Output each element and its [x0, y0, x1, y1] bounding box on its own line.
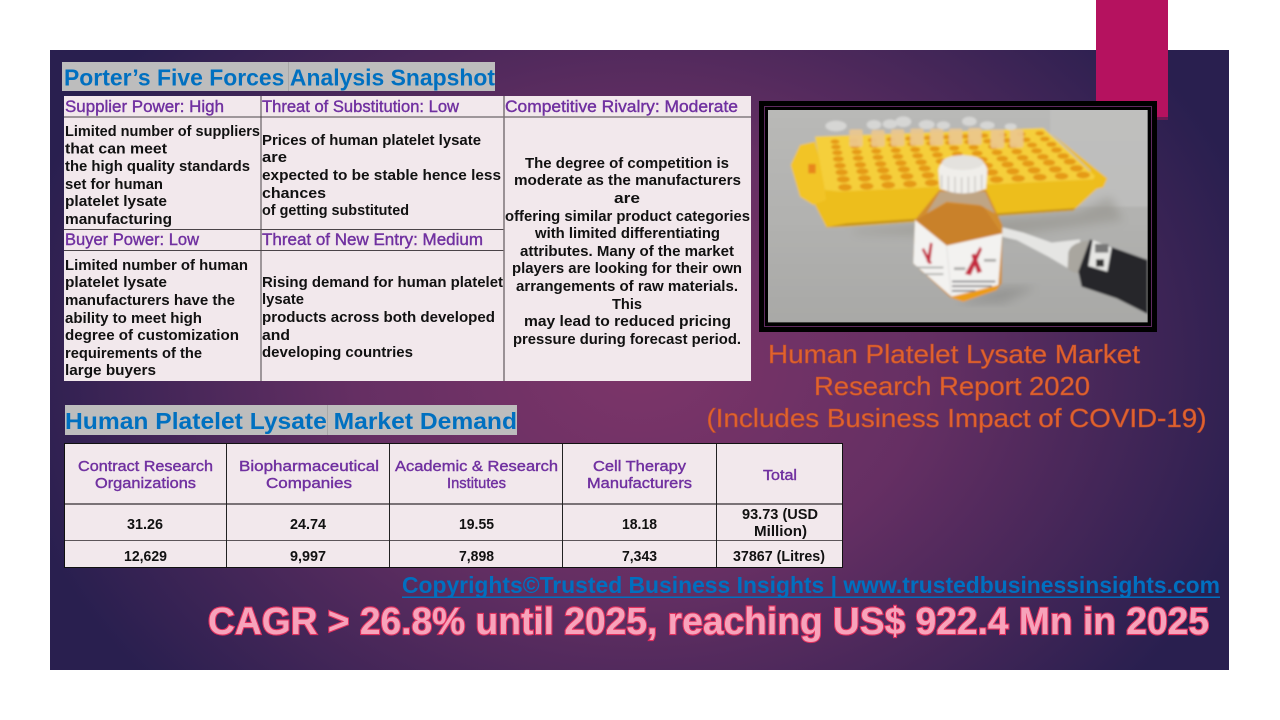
- text block: threat of substitution: Prices of human platelet lysate: [262, 132, 481, 149]
- photo: platelet lysate bottle with yellow tube rack: [759, 101, 1157, 332]
- row: USD million values: Million): [754, 523, 807, 540]
- row: litre values: 7,343: [622, 548, 657, 565]
- text block: competitive rivalry: The degree of competition is: [525, 155, 729, 172]
- row: USD million values: 18.18: [622, 516, 657, 533]
- text block: threat of new entry: lysate: [262, 291, 304, 308]
- report title: [706, 339, 1206, 433]
- text block: supplier power: set for human: [65, 176, 163, 193]
- column header: cell therapy manufacturers: [587, 458, 692, 492]
- heading: Porter's Five Forces: Porter’s Five Forces Analysis Snapshot: [64, 64, 495, 90]
- bottle body: [913, 190, 1002, 302]
- text block: buyer power: Limited number of human: [65, 257, 248, 274]
- text block: buyer power: requirements of the: [65, 345, 202, 362]
- accent tab: [1096, 0, 1168, 120]
- force heading: threat of new entry: Threat of New Entry: Medium: [262, 230, 483, 249]
- column header: biopharmaceutical companies: Biopharmaceutical: [239, 458, 379, 475]
- rack side: [815, 173, 1097, 228]
- text block: buyer power: manufacturers have the: [65, 292, 235, 309]
- row: USD million values: 31.26: [127, 516, 163, 533]
- text block: threat of new entry: [262, 274, 503, 361]
- tube caps: [825, 116, 1017, 131]
- text block: threat of substitution: chances: [262, 185, 326, 202]
- text block: buyer power: large buyers: [65, 362, 156, 379]
- row: litre values: 12,629: [124, 548, 167, 565]
- text block: supplier power: Limited number of suppliers: [65, 123, 260, 140]
- report title: Research Report 2020: [814, 371, 1090, 401]
- column header: contract research organizations: [78, 458, 213, 492]
- force heading: supplier power: Supplier Power: High: [65, 97, 224, 116]
- text block: competitive rivalry: players are looking for their own: [512, 260, 742, 277]
- rack handles: [791, 142, 826, 205]
- bottle shadow: [970, 285, 1027, 304]
- column header: academic and research institutes: Academic & Research: [395, 458, 558, 475]
- text block: supplier power: [65, 123, 260, 228]
- copyright line: Copyrights©Trusted Business Insights | www.trustedbusinessinsights.com: [402, 572, 1220, 598]
- row: USD million values: 19.55: [459, 516, 494, 533]
- row: USD million values: [127, 506, 818, 540]
- label logo: [922, 243, 982, 275]
- text block: competitive rivalry: moderate as the manufacturers: [514, 172, 741, 189]
- text block: supplier power: manufacturing: [65, 211, 172, 228]
- column header: biopharmaceutical companies: [239, 458, 379, 492]
- column header: biopharmaceutical companies: Companies: [266, 475, 352, 492]
- pipette shaft: [1002, 227, 1083, 272]
- row: USD million values: 24.74: [290, 516, 327, 533]
- row: litre values: 9,997: [290, 548, 326, 565]
- text block: supplier power: that can meet: [65, 140, 167, 158]
- text block: threat of new entry: products across both developed: [262, 309, 495, 326]
- report title: (Includes Business Impact of COVID-19): [706, 403, 1206, 433]
- text block: buyer power: [65, 257, 248, 379]
- text block: competitive rivalry: with limited differentiating: [534, 225, 720, 242]
- table: market demand: [64, 443, 843, 568]
- text block: buyer power: platelet lysate: [65, 274, 167, 291]
- column header: cell therapy manufacturers: Cell Therapy: [593, 458, 687, 475]
- text block: threat of new entry: Rising demand for human platelet: [262, 274, 503, 291]
- CAGR callout: CAGR > 26.8% until 2025, reaching US$ 922.4 Mn in 2025: [208, 601, 1209, 643]
- text block: supplier power: the high quality standards: [65, 158, 250, 175]
- column header: contract research organizations: Contract Research: [78, 458, 213, 475]
- slide background: [50, 50, 1229, 670]
- text block: threat of substitution: are: [262, 149, 287, 166]
- text block: competitive rivalry: may lead to reduced pricing: [524, 313, 731, 330]
- row: litre values: 7,898: [459, 548, 494, 565]
- row: litre values: [124, 548, 825, 565]
- text block: buyer power: ability to meet high: [65, 310, 202, 327]
- rack top: [815, 128, 1095, 192]
- column header: cell therapy manufacturers: Manufacturers: [587, 475, 692, 492]
- text block: supplier power: platelet lysate: [65, 193, 167, 210]
- text block: competitive rivalry: pressure during forecast period.: [513, 331, 741, 348]
- report title: Human Platelet Lysate Market: [768, 339, 1141, 369]
- heading: market demand: Human Platelet Lysate Market Demand: [65, 408, 517, 434]
- rack shadow: [869, 197, 1121, 236]
- text block: competitive rivalry: are: [614, 190, 640, 207]
- force heading: buyer power: Buyer Power: Low: [65, 230, 200, 249]
- panel: Porter's five forces table: [64, 96, 751, 381]
- text block: competitive rivalry: This: [612, 296, 642, 313]
- column header: academic and research institutes: [395, 458, 558, 492]
- text block: competitive rivalry: [505, 155, 750, 348]
- bottle cap: [938, 155, 987, 193]
- row: litre values: 37867 (Litres): [733, 548, 825, 565]
- column header: contract research organizations: Organizations: [95, 475, 196, 492]
- rack holes: [835, 133, 1083, 187]
- text block: buyer power: degree of customization: [65, 327, 239, 344]
- bottle label: [913, 220, 1002, 297]
- row: USD million values: 93.73 (USD: [742, 506, 818, 523]
- text block: competitive rivalry: offering similar product categories: [505, 208, 750, 225]
- text block: competitive rivalry: attributes. Many of the market: [520, 243, 734, 260]
- text block: threat of substitution: [262, 132, 501, 219]
- column header: academic and research institutes: Institutes: [447, 475, 506, 492]
- force heading: competitive rivalry: Competitive Rivalry: Moderate: [505, 97, 738, 116]
- tubes: [849, 128, 1023, 148]
- text block: threat of new entry: developing countries: [262, 344, 413, 361]
- force heading: threat of substitution: Threat of Substitution: Low: [262, 97, 460, 116]
- text block: threat of new entry: and: [262, 327, 290, 344]
- text block: competitive rivalry: arrangements of raw materials.: [516, 278, 738, 295]
- column header: total: Total: [763, 467, 797, 484]
- text block: threat of substitution: expected to be stable hence less: [262, 167, 501, 184]
- pipette body: [1078, 239, 1148, 314]
- text block: threat of substitution: of getting substituted: [262, 202, 409, 219]
